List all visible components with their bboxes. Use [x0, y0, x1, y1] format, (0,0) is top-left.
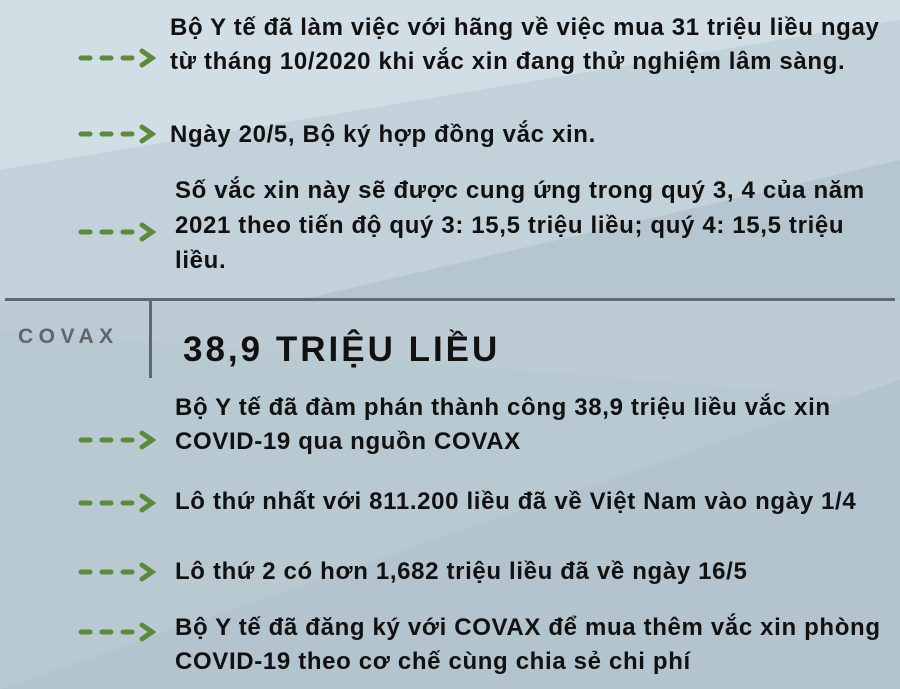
arrow 7 [78, 622, 156, 642]
text 1: Bộ Y tế đã làm việc với hãng về việc mua 31 triệu liều ngay [170, 14, 879, 41]
heading: 38,9 TRIỆU LIỀU [183, 330, 500, 369]
text 4: Bộ Y tế đã đàm phán thành công 38,9 triệu liều vắc xin [175, 394, 831, 421]
text 6: Lô thứ 2 có hơn 1,682 triệu liều đã về ngày 16/5 [175, 558, 747, 585]
arrow 6 [78, 562, 156, 582]
arrow 4 [78, 430, 156, 450]
text 3 [175, 176, 865, 274]
text 4: COVID-19 qua nguồn COVAX [175, 428, 521, 455]
arrow 2 [78, 124, 156, 144]
text 1: từ tháng 10/2020 khi vắc xin đang thử nghiệm lâm sàng. [170, 48, 845, 75]
text 1 [170, 14, 879, 75]
arrow 5 [78, 494, 156, 512]
arrow 1 [78, 48, 156, 68]
text 5: Lô thứ nhất với 811.200 liều đã về Việt Nam vào ngày 1/4 [175, 488, 856, 515]
text 3: 2021 theo tiến độ quý 3: 15,5 triệu liều; quý 4: 15,5 triệu [175, 212, 844, 239]
text 7: Bộ Y tế đã đăng ký với COVAX để mua thêm vắc xin phòng [175, 614, 881, 641]
text 7: COVID-19 theo cơ chế cùng chia sẻ chi phí [175, 648, 691, 675]
arrow 3 [78, 222, 156, 242]
text 3: liều. [175, 247, 226, 274]
text 4 [175, 393, 831, 455]
label: COVAX: COVAX [18, 325, 119, 348]
text 2: Ngày 20/5, Bộ ký hợp đồng vắc xin. [170, 121, 596, 148]
text 7 [175, 613, 881, 675]
divider [5, 298, 895, 301]
text 3: Số vắc xin này sẽ được cung ứng trong quý 3, 4 của năm [175, 177, 865, 204]
